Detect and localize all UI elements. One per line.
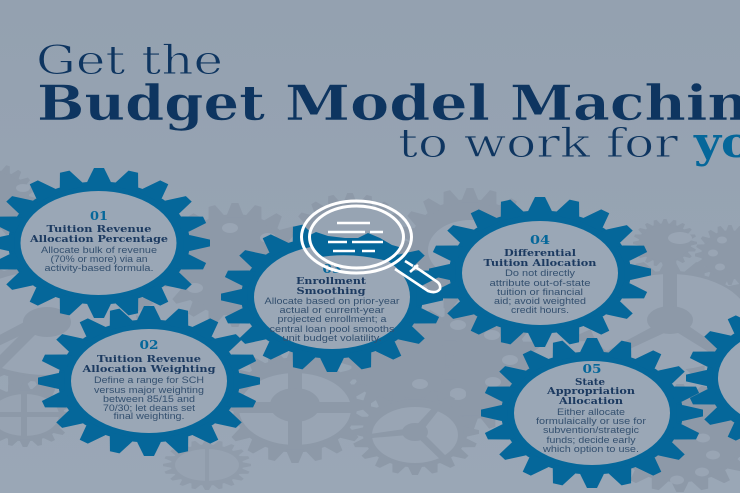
gear 03: enrollment smoothing: Allocate based on prior-year xyxy=(264,296,400,307)
gear 02: tuition revenue allocation weighting: 02 xyxy=(140,338,158,352)
gear 05: state appropriation allocation: 05 xyxy=(582,362,602,376)
gear 02: tuition revenue allocation weighting: 70/30; let deans set xyxy=(103,403,195,414)
gear 03: enrollment smoothing: Enrollment xyxy=(296,276,367,287)
gear 04: differential tuition allocation xyxy=(429,197,651,347)
gear 04: differential tuition allocation: Tuition Allocation xyxy=(484,258,597,269)
gear 05: state appropriation allocation: formulaically or use for xyxy=(536,416,646,427)
gear 05: state appropriation allocation: Allocation xyxy=(558,396,623,407)
title xyxy=(36,38,740,167)
gear 04: differential tuition allocation: aid; avoid weighted xyxy=(494,296,586,307)
gear 04: differential tuition allocation: credit hours. xyxy=(511,305,569,316)
gear 01: tuition revenue allocation percentage: Allocate bulk of revenue xyxy=(41,245,157,256)
gear 05: state appropriation allocation: funds; decide early xyxy=(546,435,636,446)
background gears xyxy=(0,164,740,492)
gear 03: enrollment smoothing: 03 xyxy=(322,262,342,276)
gear 04: differential tuition allocation: Do not directly xyxy=(505,268,575,279)
gear 03: enrollment smoothing: projected enrollment; a xyxy=(278,314,387,325)
icon: magnifying glass xyxy=(300,201,440,292)
title: Budget xyxy=(37,74,265,132)
gear 01: tuition revenue allocation percentage: (70% or more) via an xyxy=(50,254,148,265)
gear 05: state appropriation allocation: subvention/strategic xyxy=(543,425,639,436)
gear 02: tuition revenue allocation weighting: versus major weighting xyxy=(94,385,204,396)
gear 03: enrollment smoothing: Smoothing xyxy=(296,286,366,297)
gear 03: enrollment smoothing xyxy=(221,222,443,372)
gear 02: tuition revenue allocation weighting: Define a range for SCH xyxy=(94,375,204,386)
title: to work for xyxy=(398,121,679,167)
gear 05: state appropriation allocation: Either allocate xyxy=(557,407,625,418)
gear 01: tuition revenue allocation percentage: activity-based formula. xyxy=(44,263,154,274)
gear 04: differential tuition allocation: Differential xyxy=(504,248,576,259)
gear 01: tuition revenue allocation percentage: 01 xyxy=(90,209,108,223)
gear 02: tuition revenue allocation weighting: between 85/15 and xyxy=(103,394,195,405)
gear 02: tuition revenue allocation weighting xyxy=(38,306,260,456)
title: Machine xyxy=(510,74,740,132)
gear 04: differential tuition allocation: tuition or financial xyxy=(497,287,583,298)
gear 06: partial right-edge gear xyxy=(686,303,740,453)
title: Model xyxy=(285,74,490,132)
gear 03: enrollment smoothing: actual or current-year xyxy=(280,305,384,316)
gear 02: tuition revenue allocation weighting: final weighting. xyxy=(114,411,184,422)
gear 01: tuition revenue allocation percentage xyxy=(0,168,210,318)
gear 01: tuition revenue allocation percentage: Allocation Percentage xyxy=(29,234,168,245)
gear 05: state appropriation allocation: State xyxy=(575,377,605,388)
gear 04: differential tuition allocation: 04 xyxy=(530,233,550,247)
gear 01: tuition revenue allocation percentage: Tuition Revenue xyxy=(46,224,152,235)
gear 03: enrollment smoothing: central loan pool smooths xyxy=(270,324,395,335)
gear 02: tuition revenue allocation weighting: Tuition Revenue xyxy=(97,354,201,365)
gear 05: state appropriation allocation: Appropriation xyxy=(546,386,635,397)
title: Get the xyxy=(36,38,223,84)
gear 04: differential tuition allocation: attribute out-of-state xyxy=(490,278,590,289)
gear 03: enrollment smoothing: unit budget volatility. xyxy=(282,333,382,344)
gear 05: state appropriation allocation: which option to use. xyxy=(542,444,639,455)
gear 05: state appropriation allocation xyxy=(481,338,703,488)
gear 02: tuition revenue allocation weighting: Allocation Weighting xyxy=(81,364,216,375)
